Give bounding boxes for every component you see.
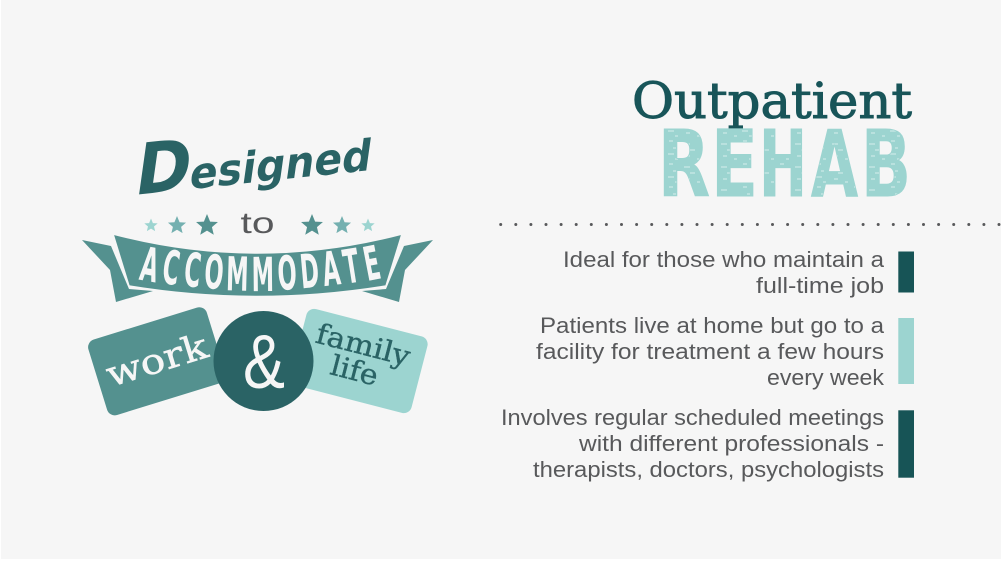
stars right	[301, 214, 375, 235]
banner text: ACCOMMODATE: C	[159, 240, 183, 297]
card: work	[86, 305, 228, 417]
ampersand circle	[214, 311, 314, 411]
bullet 2: facility for treatment a few hours	[536, 339, 884, 364]
bullet 3	[501, 405, 914, 482]
bullet 1: Ideal for those who maintain a	[563, 247, 885, 272]
bullet 2: Patients live at home but go to a	[540, 313, 885, 338]
card: family life: family	[313, 317, 414, 373]
heading: REHAB: E	[711, 111, 758, 218]
banner text: ACCOMMODATE: O	[203, 245, 226, 301]
heading: REHAB: B	[861, 111, 911, 218]
banner text: ACCOMMODATE: T	[340, 238, 363, 295]
heading: Designed: Designed	[131, 104, 379, 212]
banner text: ACCOMMODATE: C	[182, 243, 204, 299]
card: family life	[289, 307, 429, 415]
banner text: ACCOMMODATE: E	[359, 235, 385, 292]
banner text: ACCOMMODATE: M	[251, 248, 274, 303]
banner text: ACCOMMODATE	[136, 235, 385, 303]
banner text: ACCOMMODATE: M	[225, 247, 249, 302]
heading: REHAB	[658, 111, 911, 218]
bullet 2: every week	[767, 365, 885, 390]
word: to: to	[240, 207, 274, 240]
banner text: ACCOMMODATE: D	[298, 244, 321, 300]
bullet 2	[536, 313, 914, 390]
panel: outpatient rehab	[501, 72, 1001, 482]
banner text: ACCOMMODATE: A	[136, 237, 163, 294]
heading: REHAB: H	[759, 111, 807, 218]
banner text: ACCOMMODATE: A	[319, 241, 343, 297]
card: work: work	[101, 327, 213, 396]
heading: Outpatient: Outpatient	[632, 72, 912, 130]
bullet 3: Involves regular scheduled meetings	[501, 405, 884, 430]
bullet 3: therapists, doctors, psychologists	[533, 457, 884, 482]
heading: REHAB: R	[658, 111, 710, 218]
stars left	[144, 214, 218, 235]
card: family life: life	[327, 349, 382, 393]
heading: REHAB: A	[811, 111, 858, 218]
ampersand circle: &	[243, 320, 285, 405]
panel: designed to accommodate badge	[82, 104, 433, 417]
banner text: ACCOMMODATE: O	[276, 246, 298, 301]
bullet 3: with different professionals -	[578, 431, 884, 456]
bullet 1: full-time job	[756, 273, 884, 298]
ribbon banner	[82, 234, 433, 303]
bullet 1	[563, 247, 914, 298]
